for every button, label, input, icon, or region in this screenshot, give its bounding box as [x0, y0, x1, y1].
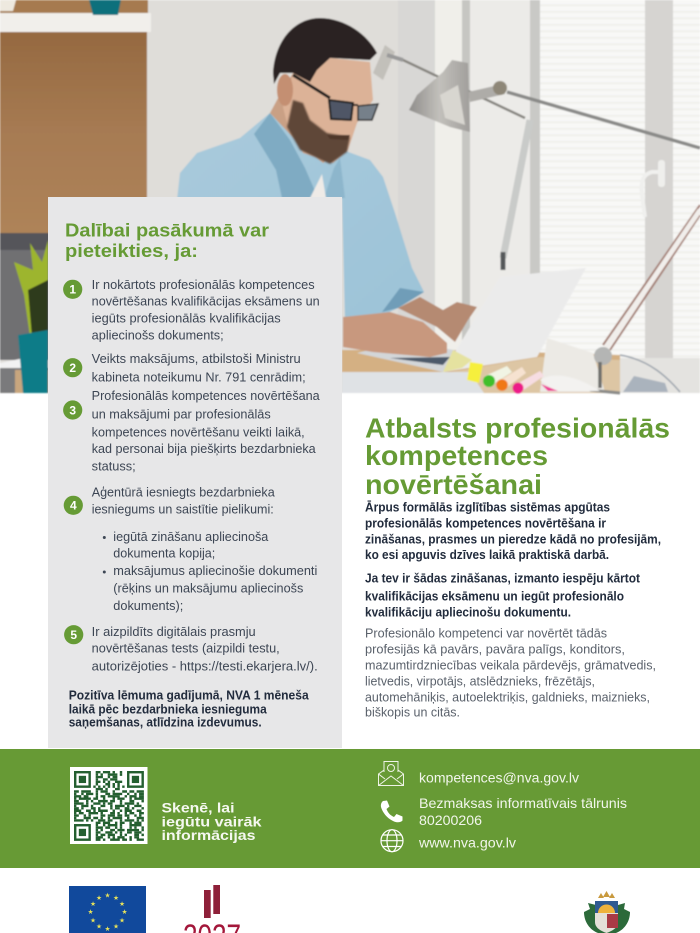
title: novērtēšanai [365, 469, 542, 500]
QR caption: informācijas [162, 828, 256, 843]
item 3: un maksājumi par profesionālās [92, 408, 271, 422]
item 4 with bullet list: 4 [70, 499, 77, 513]
logo: EU flag: ★ [122, 908, 128, 916]
item 5: novērtēšanas tests (aizpildi testu, [92, 642, 280, 656]
logo: EU flag: ★ [119, 916, 125, 924]
bold call to action: Ja tev ir šādas zināšanas, izmanto iespēju kārtot [365, 570, 641, 585]
reimbursement note: Pozitīva lēmuma gadījumā, NVA 1 mēneša [69, 688, 309, 703]
item 3: 3 [69, 403, 76, 417]
beard [287, 100, 350, 164]
item 3: statuss; [92, 460, 136, 474]
list of professions: automehāniķis, autoelektriķis, galdnieks, maiznieks, [365, 690, 650, 704]
item 3: kompetences novērtēšanu veikti laikā, [92, 426, 305, 440]
item 1: novērtēšanas kvalifikācijas eksāmens un [92, 295, 320, 309]
item 4 with bullet list: iegūtā zināšanu apliecinoša [113, 530, 268, 544]
reimbursement note: laikā pēc bezdarbnieka iesnieguma [69, 701, 267, 716]
QR code [70, 767, 148, 844]
QR caption: Skenē, lai [162, 801, 234, 816]
hands [343, 297, 477, 357]
list of professions: Profesionālo kompetenci var novērtēt tādās [365, 626, 607, 640]
list of professions: profesijās kā pavārs, pavāra palīgs, konditors, [365, 642, 625, 656]
icon: phone [381, 800, 402, 822]
logo: EU flag: ★ [113, 894, 119, 902]
item 3: Profesionālās kompetences novērtēšana [92, 389, 320, 403]
panel: eligibility conditions [48, 197, 342, 748]
ear [277, 74, 293, 106]
item 4 with bullet list: (rēķins un maksājumu apliecinošs [113, 581, 303, 595]
intro text: bold definition: ko esi apguvis dzīves laikā praktiskā darbā. [365, 547, 609, 562]
highlighter markers [467, 362, 600, 394]
logo: EU flag: ★ [113, 922, 119, 930]
item 2: kabineta noteikumu Nr. 791 cenrādim; [92, 371, 306, 385]
logo: EU flag: ★ [119, 900, 125, 908]
item 4 with bullet list: dokumenta kopija; [113, 547, 215, 561]
bold call to action: kvalifikācijas eksāmenu un iegūt profesionālo [365, 589, 624, 604]
contact band [0, 749, 700, 868]
list of professions [365, 626, 656, 720]
logo: Latvian coat of arms [584, 891, 630, 933]
desk lamps [373, 45, 700, 270]
phone number [419, 795, 627, 828]
logo: EU flag [69, 886, 146, 933]
panel heading [65, 220, 269, 261]
logo: EU flag: ★ [105, 892, 111, 900]
QR caption: iegūtu vairāk [162, 815, 262, 830]
title [365, 412, 670, 500]
desk lamp base and arms [590, 205, 700, 393]
item 4 with bullet list [64, 486, 317, 613]
item 1: iegūts profesionālās kvalifikācijas [92, 312, 281, 326]
item 3 [63, 389, 320, 474]
item 2 [63, 352, 306, 385]
laptop [357, 268, 586, 372]
item 4 with bullet list: dokuments); [113, 599, 183, 613]
intro text: bold definition: Ārpus formālās izglītības sistēmas apgūtas [365, 500, 610, 515]
item 5: Ir aizpildīts digitālais prasmju [92, 625, 256, 639]
item 4 with bullet list: maksājumus apliecinošie dokumenti [113, 564, 317, 578]
list of professions: biškopis un citās. [365, 706, 460, 720]
list of professions: lietvedis, virpotājs, atslēdznieks, frēzētājs, [365, 674, 595, 688]
potted plant [14, 240, 48, 393]
window frame and blinds [398, 0, 700, 393]
icon: envelope [378, 762, 404, 786]
QR caption [162, 801, 262, 843]
bold call to action: kvalifikāciju apliecinošu dokumentu. [365, 605, 571, 620]
panel heading: Dalībai pasākumā var [65, 220, 269, 240]
reimbursement note: saņemšanas, atlīdzina izdevumus. [69, 715, 262, 730]
logo: EU flag: ★ [90, 900, 96, 908]
icon: globe [381, 830, 403, 852]
item 4 with bullet list: iesniegums un saistītie pielikumi: [92, 502, 274, 516]
phone number: 80200206 [419, 812, 482, 828]
bold call to action [365, 570, 641, 620]
man in denim shirt [177, 18, 424, 320]
logo: EU flag: ★ [105, 925, 111, 933]
logo: EU flag: ★ [96, 894, 102, 902]
email address: kompetences@nva.gov.lv [419, 769, 579, 785]
item 1: Ir nokārtots profesionālās kompetences [92, 278, 315, 292]
neck and face [270, 60, 360, 163]
intro text: bold definition [365, 500, 661, 562]
logo: EU flag: ★ [90, 916, 96, 924]
intro text: bold definition: zināšanas, prasmes un pieredze kādā no profesijām, [365, 531, 661, 546]
hair [273, 18, 377, 84]
item 1: apliecinošs dokuments; [92, 328, 224, 342]
panel heading: pieteikties, ja: [65, 240, 198, 261]
item 5 [64, 625, 318, 674]
title: kompetences [365, 440, 548, 471]
shirt [177, 113, 424, 320]
reimbursement note [69, 688, 309, 730]
photo background wall [0, 0, 700, 393]
hero photo: man working on a laptop [0, 0, 700, 394]
item 3: kad personai bija piešķirts bezdarbnieka [92, 442, 316, 456]
item 4 with bullet list: Aģentūrā iesniegts bezdarbnieka [92, 486, 275, 500]
website: www.nva.gov.lv [418, 834, 516, 850]
desk with paper [342, 338, 700, 393]
item 5: autorizējoties - https://testi.ekarjera.lv/). [92, 660, 318, 674]
logo: EU flag: ★ [88, 908, 94, 916]
intro text: bold definition: profesionālās kompetences novērtēšana ir [365, 515, 606, 530]
logo: Latvia 2027 [183, 885, 241, 933]
wood wall panel with shelf [0, 0, 151, 393]
item 1 [63, 278, 320, 342]
item 1: 1 [69, 282, 76, 296]
item 5: 5 [70, 628, 77, 642]
item 2: 2 [69, 361, 76, 375]
item 2: Veikts maksājums, atbilstoši Ministru [92, 352, 301, 366]
phone number: Bezmaksas informatīvais tālrunis [419, 795, 627, 811]
logo: EU flag: ★ [96, 922, 102, 930]
title: Atbalsts profesionālās [365, 412, 670, 443]
list of professions: mazumtirdzniecības veikala pārdevējs, grāmatvedis, [365, 658, 656, 672]
glasses [293, 75, 378, 120]
